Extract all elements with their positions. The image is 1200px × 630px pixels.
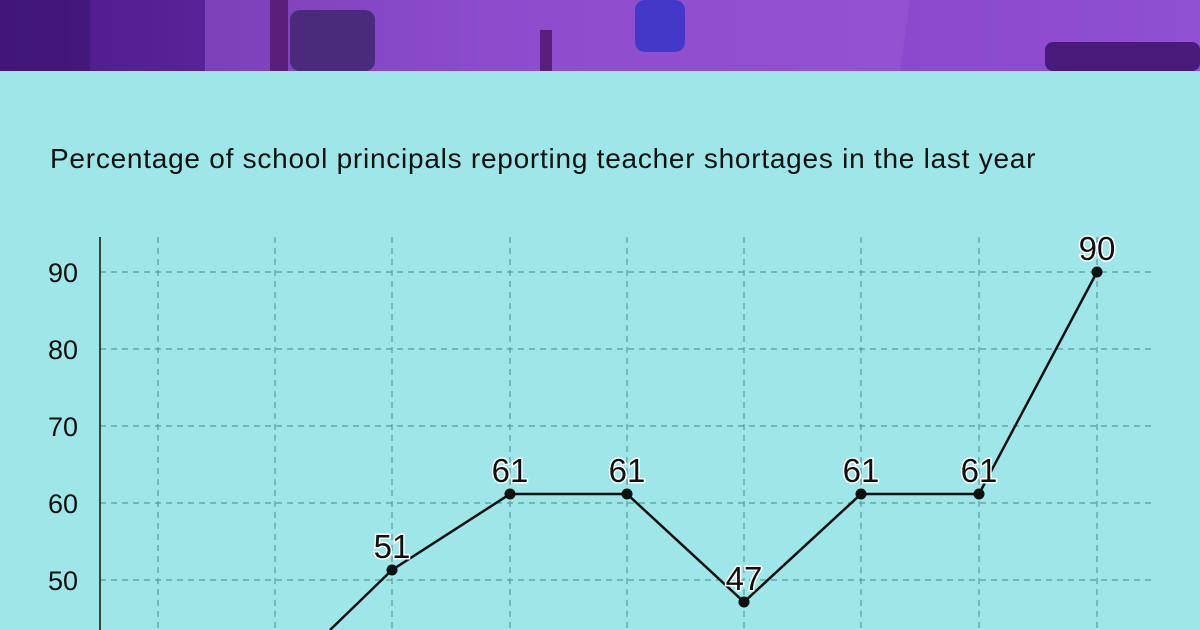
data labels: 61: [609, 452, 645, 489]
y axis: 60: [48, 489, 78, 519]
data labels: 61: [492, 452, 528, 489]
y axis: 90: [48, 258, 78, 288]
data labels: 61: [961, 452, 997, 489]
data line: [330, 266, 1102, 630]
data labels: [374, 230, 1115, 597]
y axis: [48, 237, 100, 630]
data labels: 61: [843, 452, 879, 489]
y axis: 70: [48, 412, 78, 442]
data labels: 51: [374, 528, 410, 565]
chart title: Percentage of school principals reporting teacher shortages in the last year: [50, 143, 1036, 174]
y axis: 80: [48, 335, 78, 365]
y axis: 50: [48, 566, 78, 596]
data labels: 90: [1079, 230, 1115, 267]
header photo band: [0, 0, 1200, 71]
data labels: 47: [726, 560, 762, 597]
